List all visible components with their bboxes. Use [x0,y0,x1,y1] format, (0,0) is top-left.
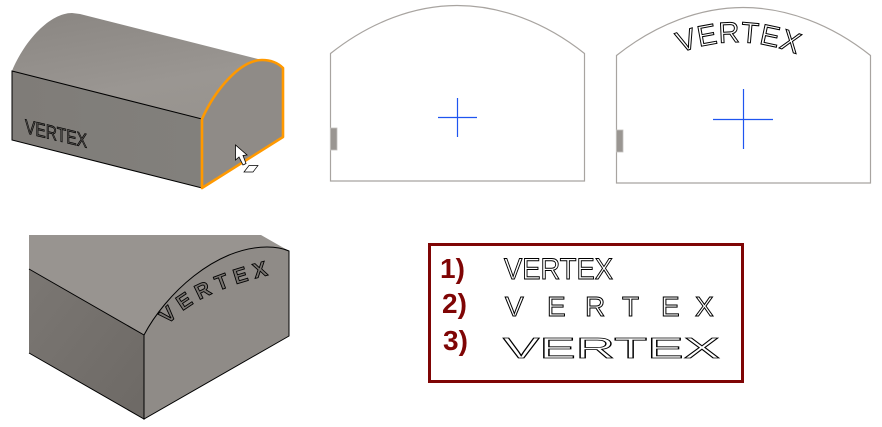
icon: sketch plane glyph [244,166,258,172]
outline text, normal: VERTEX [504,253,613,286]
embossed curved text: VERTEX: VERTEX [158,260,269,322]
left side face [29,269,144,419]
front side face [12,71,202,188]
legend panel: text width options [430,244,742,382]
blue centre cross [713,89,773,149]
top curved surface [29,235,289,335]
top curved surface [12,13,262,119]
label 3: 3) [443,325,468,356]
profile outline [330,6,584,181]
embossed text: VERTEX on side face: VERTEX [25,116,87,153]
outline text, stretched: VERTEX [503,333,720,365]
end face [144,247,289,419]
curved outline text: VERTEX: VERTEX [673,22,803,54]
blue centre cross [438,98,477,137]
outline text, spaced: VERTEX [505,291,714,322]
icon: mouse cursor [236,145,247,165]
profile outline [616,8,870,183]
label 1: 1) [440,253,465,284]
3D block with wrapped text, bottom view [28,235,290,420]
3D block with selected end face [12,13,283,188]
small grey tab [330,128,337,150]
sketch view: empty profile [330,6,584,181]
panel border [430,244,742,382]
sketch view: profile with curved text [616,6,872,184]
small grey tab [616,130,623,152]
highlighted end face [202,60,283,188]
label 2: 2) [442,288,467,319]
